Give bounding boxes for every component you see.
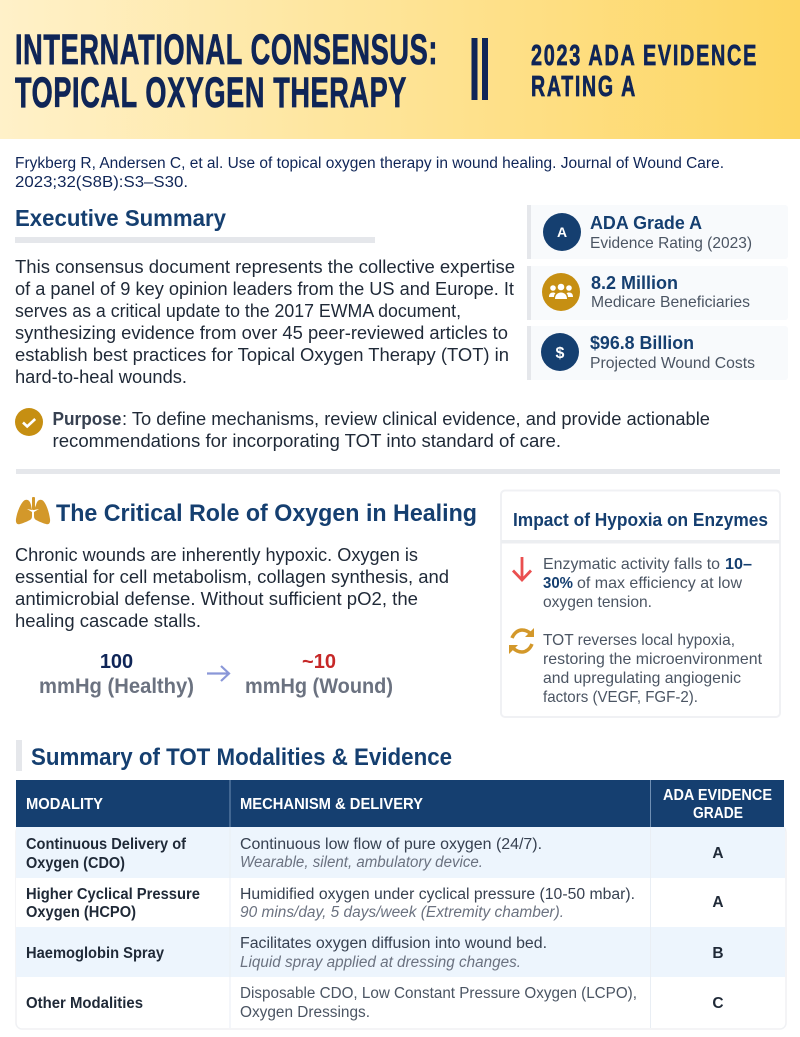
- stat: wound pO2: ~10: [302, 651, 336, 673]
- oxygen text: antimicrobial defense. Without sufficient pO2, the: [15, 589, 418, 609]
- TOT text: factors (VEGF, FGF-2).: [543, 689, 698, 706]
- table: modalities: [16, 780, 786, 1029]
- executive summary text: synthesizing evidence from over 45 peer-reviewed articles to: [15, 323, 508, 343]
- stat card: wound costs: [527, 326, 788, 380]
- row: other modalities: Other Modalities: [26, 995, 143, 1012]
- icon: dollar: $: [556, 345, 565, 362]
- oxygen text: Chronic wounds are inherently hypoxic. Oxygen is: [15, 545, 418, 565]
- heading: executive summary: Executive Summary: [15, 205, 226, 231]
- citation: Frykberg R, Andersen C, et al. Use of topical oxygen therapy in wound healing. Journal of Wound Care.: [15, 155, 724, 172]
- panel: impact of hypoxia: [501, 490, 780, 717]
- purpose callout: Purpose: [52, 409, 122, 429]
- stat card: ADA grade: ADA Grade A: [590, 213, 702, 233]
- TOT text: [543, 632, 763, 706]
- executive summary text: This consensus document represents the collective expertise: [15, 257, 515, 277]
- executive summary text: hard-to-heal wounds.: [15, 367, 187, 387]
- evidence rating subtitle: RATING A: [531, 71, 637, 103]
- executive summary text: establish best practices for Topical Oxygen Therapy (TOT) in: [15, 345, 509, 365]
- stat card: ADA grade: [527, 205, 788, 259]
- stat card: ADA grade: Evidence Rating (2023): [590, 235, 752, 252]
- evidence rating subtitle: [531, 40, 758, 103]
- row: other modalities: [26, 985, 724, 1021]
- double bar separator: [472, 38, 488, 100]
- row: haemoglobin spray: B: [712, 945, 724, 962]
- icon: lungs: [16, 497, 50, 524]
- TOT text: TOT reverses local hypoxia,: [543, 632, 735, 649]
- TOT text: restoring the microenvironment: [543, 651, 763, 668]
- stat card: beneficiaries: Medicare Beneficiaries: [591, 294, 750, 311]
- enzyme text: [543, 556, 752, 611]
- stat card: beneficiaries: 8.2 Million: [591, 273, 678, 293]
- row: other modalities: Oxygen Dressings.: [240, 1004, 370, 1021]
- table header: MECHANISM & DELIVERY: [240, 796, 424, 813]
- stat: healthy pO2: [39, 651, 194, 698]
- row: haemoglobin spray: Haemoglobin Spray: [26, 945, 164, 962]
- row: CDO: [16, 827, 785, 878]
- heading: summary of modalities: Summary of TOT Modalities & Evidence: [31, 744, 452, 771]
- icon: grade A: [543, 213, 581, 251]
- stat card: wound costs: $96.8 Billion: [590, 333, 694, 353]
- row: other modalities: Disposable CDO, Low Constant Pressure Oxygen (LCPO),: [240, 985, 637, 1002]
- row: HCPO: [16, 878, 785, 927]
- enzyme text: Enzymatic activity falls to: [543, 556, 720, 573]
- enzyme text: of max efficiency at low: [577, 575, 742, 592]
- executive summary text: [15, 257, 515, 387]
- heading: executive summary: [15, 205, 375, 243]
- row: HCPO: A: [712, 894, 724, 911]
- panel: impact of hypoxia: Impact of Hypoxia on Enzymes: [513, 510, 768, 530]
- stat: healthy pO2: mmHg (Healthy): [39, 675, 194, 698]
- stat: wound pO2: [245, 651, 393, 698]
- row: CDO: Wearable, silent, ambulatory device.: [240, 854, 483, 871]
- row: HCPO: Oxygen (HCPO): [26, 904, 136, 921]
- stat: healthy pO2: 100: [100, 651, 133, 673]
- table header: [16, 780, 784, 827]
- table header: ADA EVIDENCE: [663, 787, 772, 804]
- oxygen text: healing cascade stalls.: [15, 611, 201, 631]
- enzyme text: 10–: [725, 556, 752, 573]
- purpose callout: recommendations for incorporating TOT into standard of care.: [52, 431, 561, 451]
- arrow: [207, 666, 229, 681]
- citation: [15, 155, 724, 191]
- stat card: beneficiaries: [527, 266, 788, 320]
- stat card: wound costs: Projected Wound Costs: [590, 355, 755, 372]
- icon: grade A: A: [557, 224, 567, 240]
- icon: check: [15, 408, 43, 436]
- icon: people: [542, 273, 580, 311]
- oxygen text: essential for cell metabolism, collagen synthesis, and: [15, 567, 449, 587]
- title: TOPICAL OXYGEN THERAPY: [15, 69, 407, 117]
- row: haemoglobin spray: [16, 927, 785, 977]
- table header: MODALITY: [26, 796, 104, 813]
- executive summary text: of a panel of 9 key opinion leaders from the US and Europe. It: [15, 279, 514, 299]
- TOT text: and upregulating angiogenic: [543, 670, 741, 687]
- title: [15, 26, 438, 117]
- row: CDO: Continuous low flow of pure oxygen (24/7).: [240, 836, 542, 853]
- icon: refresh: [509, 628, 534, 654]
- row: haemoglobin spray: Facilitates oxygen diffusion into wound bed.: [240, 935, 547, 952]
- row: haemoglobin spray: Liquid spray applied at dressing changes.: [240, 954, 521, 971]
- citation: 2023;32(S8B):S3–S30.: [15, 174, 188, 191]
- heading: role of oxygen: The Critical Role of Oxygen in Healing: [56, 500, 477, 527]
- executive summary text: serves as a critical update to the 2017 EWMA document,: [15, 301, 461, 321]
- enzyme text: oxygen tension.: [543, 594, 652, 611]
- row: CDO: A: [712, 845, 724, 862]
- icon: down arrow: [513, 557, 531, 580]
- purpose callout: [15, 408, 710, 451]
- enzyme text: 30%: [543, 575, 573, 592]
- row: HCPO: Humidified oxygen under cyclical pressure (10-50 mbar).: [240, 886, 635, 903]
- oxygen text: [15, 545, 449, 631]
- table header: GRADE: [693, 805, 743, 822]
- icon: dollar: [541, 333, 579, 371]
- row: HCPO: Higher Cyclical Pressure: [26, 886, 200, 903]
- row: CDO: Oxygen (CDO): [26, 855, 125, 872]
- row: HCPO: 90 mins/day, 5 days/week (Extremity chamber).: [240, 904, 564, 921]
- title: INTERNATIONAL CONSENSUS:: [15, 26, 438, 74]
- row: CDO: Continuous Delivery of: [26, 836, 187, 853]
- stat: wound pO2: mmHg (Wound): [245, 675, 393, 698]
- header banner: [0, 0, 800, 139]
- row: other modalities: C: [712, 995, 724, 1012]
- purpose callout: : To define mechanisms, review clinical evidence, and provide actionable: [122, 409, 710, 429]
